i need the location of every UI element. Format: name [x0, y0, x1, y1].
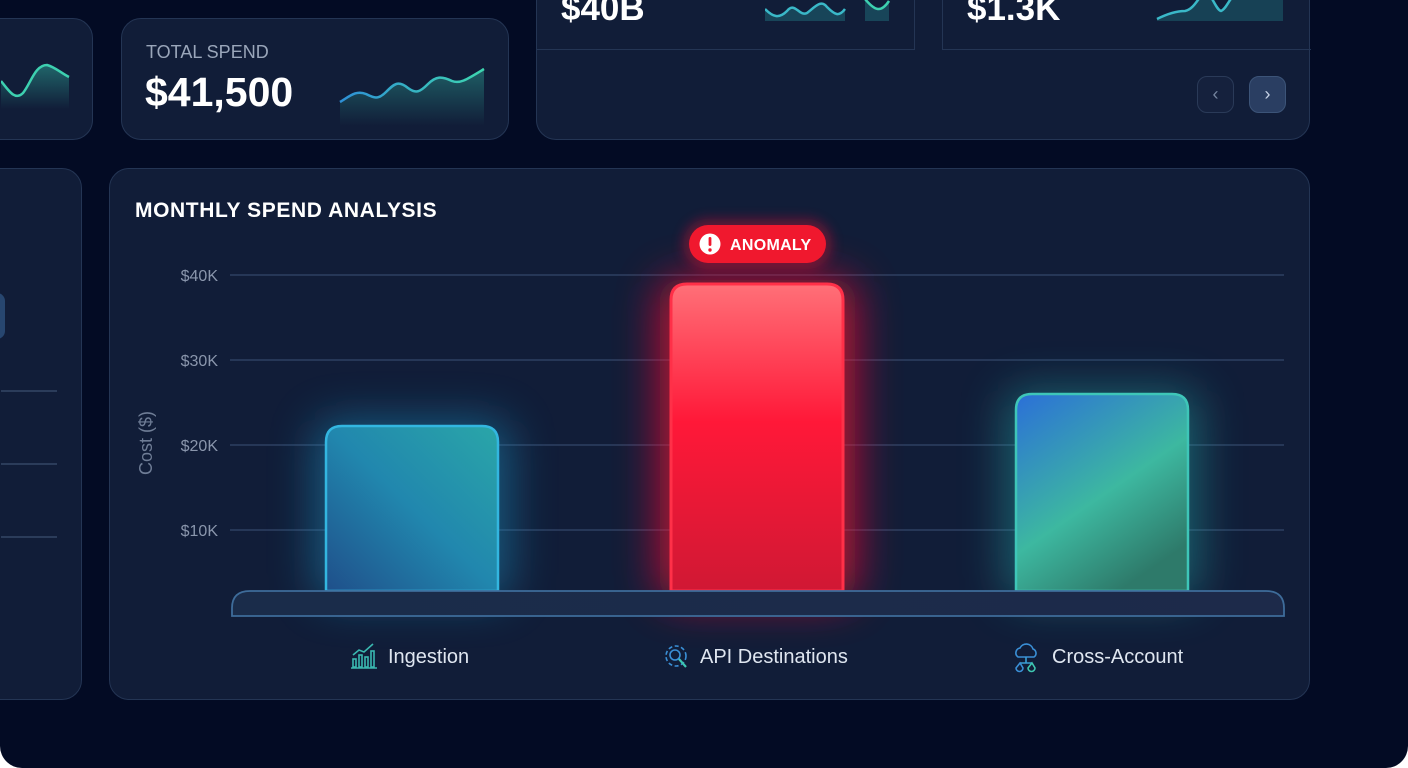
y-axis labels — [181, 268, 218, 540]
sparkline: $1.3K — [1156, 0, 1283, 21]
chart base platform — [232, 591, 1284, 616]
sparkline: total spend — [339, 68, 485, 119]
panel: left partial sidebar — [0, 168, 82, 700]
legend: api destinations: API Destinations — [700, 646, 848, 668]
y-axis labels: $30K — [181, 353, 218, 370]
y-axis labels: $40K — [181, 268, 218, 285]
label: total spend: TOTAL SPEND — [146, 42, 269, 62]
legend: ingestion: Ingestion — [388, 646, 469, 668]
legend: cross-account: Cross-Account — [1052, 646, 1184, 668]
legend: ingestion — [351, 644, 469, 668]
panel: top-right carousel — [536, 0, 1310, 140]
button: partial — [0, 293, 5, 339]
glows — [315, 420, 510, 600]
panel: total spend card — [121, 18, 509, 140]
bar: ingestion — [326, 426, 498, 591]
button: next: › — [1264, 84, 1270, 104]
bar: api destinations (anomaly) — [671, 284, 843, 591]
panel: monthly spend analysis — [109, 168, 1310, 700]
sparkline: left card — [1, 64, 70, 104]
callout: anomaly badge: ANOMALY — [730, 237, 812, 254]
button: next — [1249, 76, 1286, 113]
callout: anomaly badge — [683, 219, 832, 269]
sub-card: $1.3K — [942, 0, 1311, 50]
button: previous: ‹ — [1212, 84, 1218, 104]
heading: monthly spend analysis: MONTHLY SPEND ANALYSIS — [135, 199, 437, 222]
y-axis title: Cost ($) — [136, 411, 156, 475]
panel: left partial card — [0, 18, 93, 140]
sparkline: $40B — [765, 0, 890, 21]
legend: cross-account — [1016, 644, 1184, 672]
y-axis labels: $20K — [181, 438, 218, 455]
sub-card: $40B — [537, 0, 915, 50]
button: previous — [1197, 76, 1234, 113]
bar: cross-account — [1016, 394, 1188, 591]
value: $41,500: $41,500 — [145, 69, 293, 115]
y-axis labels: $10K — [181, 523, 218, 540]
